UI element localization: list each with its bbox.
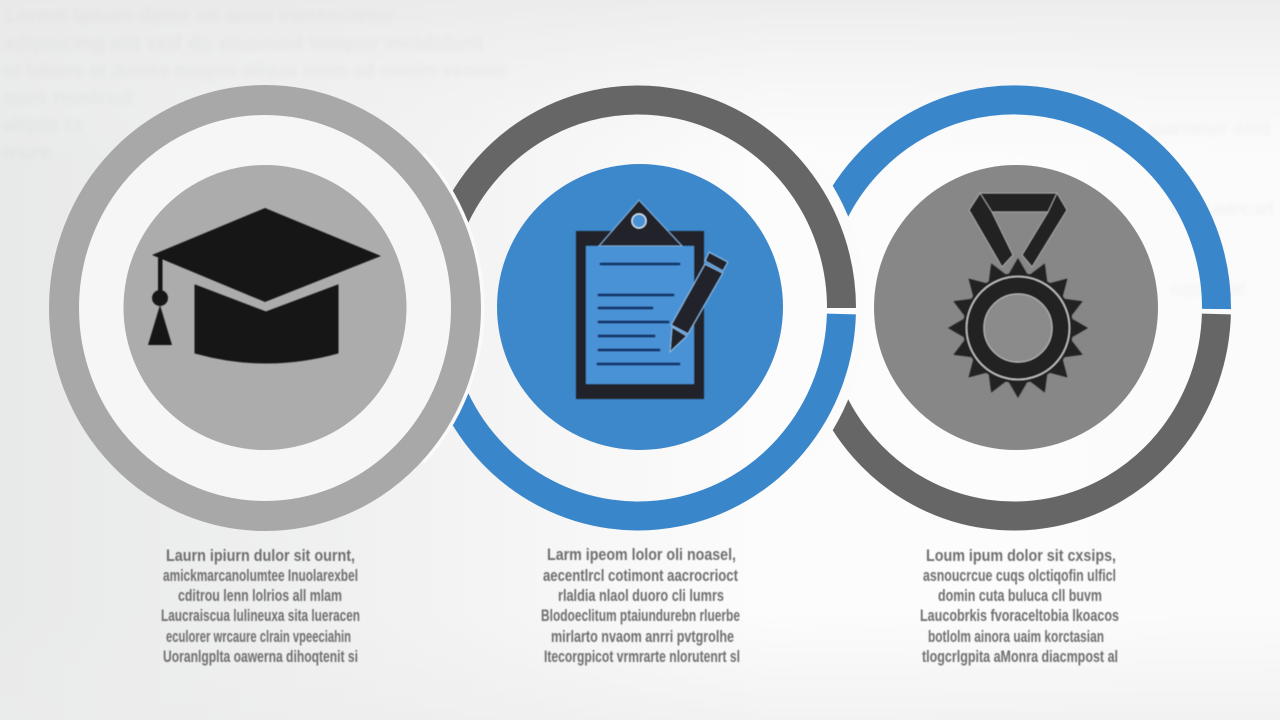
faint background text: irure: [3, 142, 53, 164]
text block: step 2: [541, 545, 740, 666]
faint background text: occaecat: [1170, 198, 1275, 220]
text block: step 1: [161, 546, 360, 666]
text block: step 1: Uoranlgplta oawerna dihoqtenit si: [163, 647, 358, 666]
disc: grey background circle: [874, 165, 1158, 450]
panel: step 2 assessment: [451, 100, 842, 516]
disc: grey background circle: [124, 165, 406, 450]
faint background text: cupidatat: [1170, 278, 1245, 300]
text block: step 1: eculorer wrcaure clrain vpeeciahin: [166, 627, 351, 646]
panel: step 1 education: [64, 100, 483, 516]
arc: dark grey lower ring: [828, 314, 1216, 516]
ring: grey outer ring: [64, 100, 466, 516]
icon: medal: [948, 193, 1088, 398]
faint background text: aliquip ex: [3, 114, 83, 136]
disc: blue background circle: [497, 164, 783, 450]
faint background text: ut labore et dolore magna aliqua enim ad minim veniam: [3, 60, 508, 82]
text block: step 2: Blodoeclitum ptaiundurebn rluerbe: [541, 606, 740, 625]
faint background text: pariatur sint: [1150, 118, 1270, 140]
text block: step 3: Loum ipum dolor sit cxsips,: [926, 546, 1116, 565]
text block: step 1: amickmarcanolumtee Inuolarexbel: [163, 566, 358, 585]
arc: dark grey upper ring: [451, 100, 842, 308]
text block: step 2: rlaldia nlaol duoro cli lumrs: [558, 586, 724, 605]
text block: step 2: mirlarto nvaom anrri pvtgrolhe: [551, 627, 734, 646]
text block: step 3: [920, 546, 1119, 666]
panel: step 3 award: [806, 100, 1217, 516]
text block: step 1: Laurn ipiurn dulor sit ournt,: [166, 546, 355, 565]
halo: thin gap around ring: [423, 154, 483, 462]
icon: clipboard and pencil: [576, 200, 728, 399]
faint background text: adipiscing elit sed do eiusmod tempor incididunt: [3, 33, 483, 55]
text block: step 2: Larm ipeom lolor oli noasel,: [547, 545, 736, 564]
arc: blue upper ring: [828, 100, 1217, 309]
text block: step 1: Laucraiscua lulineuxa sita lueracen: [161, 606, 360, 625]
text block: step 3: asnoucrcue cuqs olctiqofin ulficl: [923, 566, 1116, 585]
text block: step 3: tlogcrlgpita aMonra diacmpost al: [922, 647, 1118, 666]
text block: step 3: botlolm ainora uaim korctasian: [928, 627, 1104, 646]
text block: step 3: domin cuta buluca cll buvm: [938, 586, 1102, 605]
text block: step 2: aecentlrcl cotimont aacrocrioct: [543, 566, 738, 585]
text block: step 2: Itecorgpicot vrmrarte nlorutenrt sl: [544, 647, 740, 666]
halo: gap beside middle ring: [806, 158, 861, 458]
faint background text: Lorem ipsum dolor sit amet consectetur: [5, 5, 395, 27]
icon: graduation cap: [148, 208, 381, 363]
faint background text: quis nostrud: [3, 87, 133, 109]
faint background text: [3, 5, 1275, 300]
text block: step 3: Laucobrkis fvoraceltobia lkoacos: [920, 606, 1119, 625]
arc: blue lower ring: [451, 314, 841, 516]
text block: step 1: cditrou lenn lolrios all mlam: [178, 586, 342, 605]
